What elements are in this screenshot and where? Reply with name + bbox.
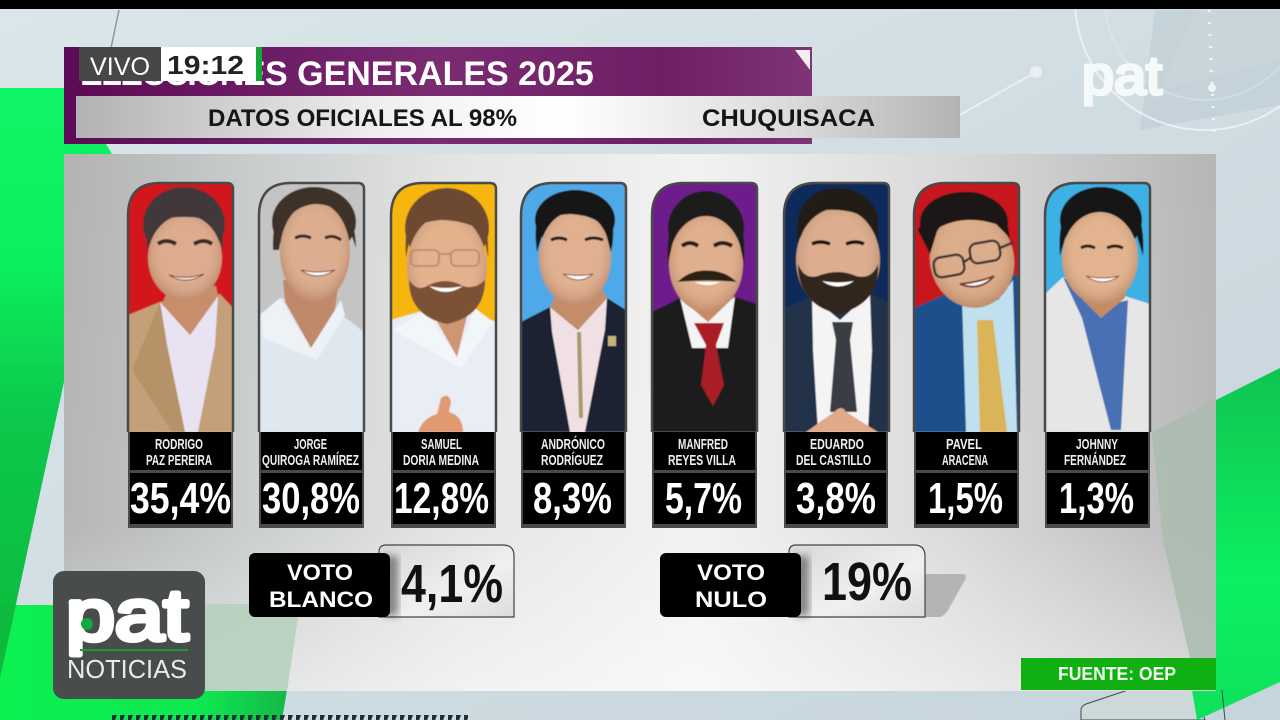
candidate 1: Rodrigo Paz Pereira <box>128 180 233 432</box>
result card 4: 8,3% <box>533 474 612 523</box>
result card 2: JORGE <box>294 436 327 453</box>
result card 4: ANDRÓNICO <box>541 435 605 453</box>
result card 4 <box>521 432 626 528</box>
green shape right <box>1192 368 1280 720</box>
result card 7: 1,5% <box>928 474 1003 523</box>
result card 3: 12,8% <box>394 474 489 523</box>
bottom ticker strip <box>110 715 468 720</box>
blank vote callout: VOTO <box>287 560 353 585</box>
blank vote callout: 4,1% <box>401 554 503 614</box>
green notch under header <box>64 144 112 154</box>
result card 1: 35,4% <box>130 474 231 523</box>
null vote callout: NULO <box>695 587 767 612</box>
candidate 5: Manfred Reyes Villa <box>652 180 757 432</box>
result card 8: 1,3% <box>1059 474 1134 523</box>
result card 2: 30,8% <box>262 474 360 523</box>
background decoration: circuit rings <box>960 0 1280 135</box>
corner triangle <box>795 50 810 70</box>
blank vote callout: BLANCO <box>269 587 373 612</box>
result card 5: MANFRED <box>678 436 728 453</box>
pat noticias logo: NOTICIAS <box>67 654 187 684</box>
live clock bug: VIVO <box>90 53 150 81</box>
result card 6: DEL CASTILLO <box>796 452 871 469</box>
result card 1 <box>128 432 233 528</box>
dark green wedge <box>0 605 16 678</box>
null vote callout <box>660 545 966 617</box>
result card 1: PAZ PEREIRA <box>146 452 212 469</box>
result card 5: 5,7% <box>665 474 742 523</box>
result card 3 <box>391 432 496 528</box>
result card 3: DORIA MEDINA <box>403 452 479 469</box>
result card 8: JOHNNY <box>1076 436 1118 453</box>
result card 6: 3,8% <box>796 474 876 523</box>
header band <box>64 47 812 144</box>
live clock bug: 19:12 <box>167 50 244 80</box>
result card 4: RODRÍGUEZ <box>541 452 603 469</box>
official data text: DATOS OFICIALES AL 98% <box>208 105 517 132</box>
source tag <box>1021 658 1216 690</box>
candidate 3: Samuel Doria Medina <box>391 180 496 432</box>
candidate 8: Johnny Fernández <box>1045 180 1150 432</box>
bottom right frame <box>1081 690 1205 720</box>
null vote callout: VOTO <box>697 560 765 585</box>
main panel <box>64 154 1216 691</box>
result card 6: EDUARDO <box>810 436 864 453</box>
result card 3: SAMUEL <box>421 436 462 453</box>
region text: CHUQUISACA <box>702 105 875 132</box>
result card 7: PAVEL <box>946 436 982 453</box>
candidate 2: Jorge Quiroga Ramírez <box>259 180 364 432</box>
result card 6 <box>784 432 888 528</box>
result card 8 <box>1045 432 1150 528</box>
green shape left <box>0 88 64 678</box>
live clock bug <box>79 47 262 81</box>
null vote callout: 19% <box>822 552 912 612</box>
source tag: FUENTE: OEP <box>1058 664 1176 684</box>
candidate 6: Eduardo Del Castillo <box>784 180 889 432</box>
thin line on green right <box>1222 690 1225 720</box>
blank vote callout <box>249 545 514 617</box>
candidate 4: Andrónico Rodríguez <box>521 180 626 432</box>
pat watermark top right: pat <box>1082 46 1162 106</box>
pat noticias logo <box>53 571 205 699</box>
title: ELECCIONE <box>80 55 265 93</box>
result card 5 <box>652 432 757 528</box>
result card 2 <box>259 432 364 528</box>
title: S GENERALES 2025 <box>265 55 594 93</box>
pat noticias logo: pat <box>66 576 188 656</box>
black top bar <box>0 0 1280 9</box>
subtitle bar <box>76 96 960 138</box>
candidate 7: Pavel Aracena <box>914 180 1023 432</box>
background: line top left <box>111 10 119 48</box>
result card 7 <box>914 432 1019 528</box>
green shape bottom left <box>0 605 287 720</box>
result card 2: QUIROGA RAMÍREZ <box>262 452 359 469</box>
result card 7: ARACENA <box>942 452 988 469</box>
result card 8: FERNÁNDEZ <box>1064 452 1126 469</box>
result card 5: REYES VILLA <box>668 452 736 469</box>
result card 1: RODRIGO <box>155 436 203 453</box>
